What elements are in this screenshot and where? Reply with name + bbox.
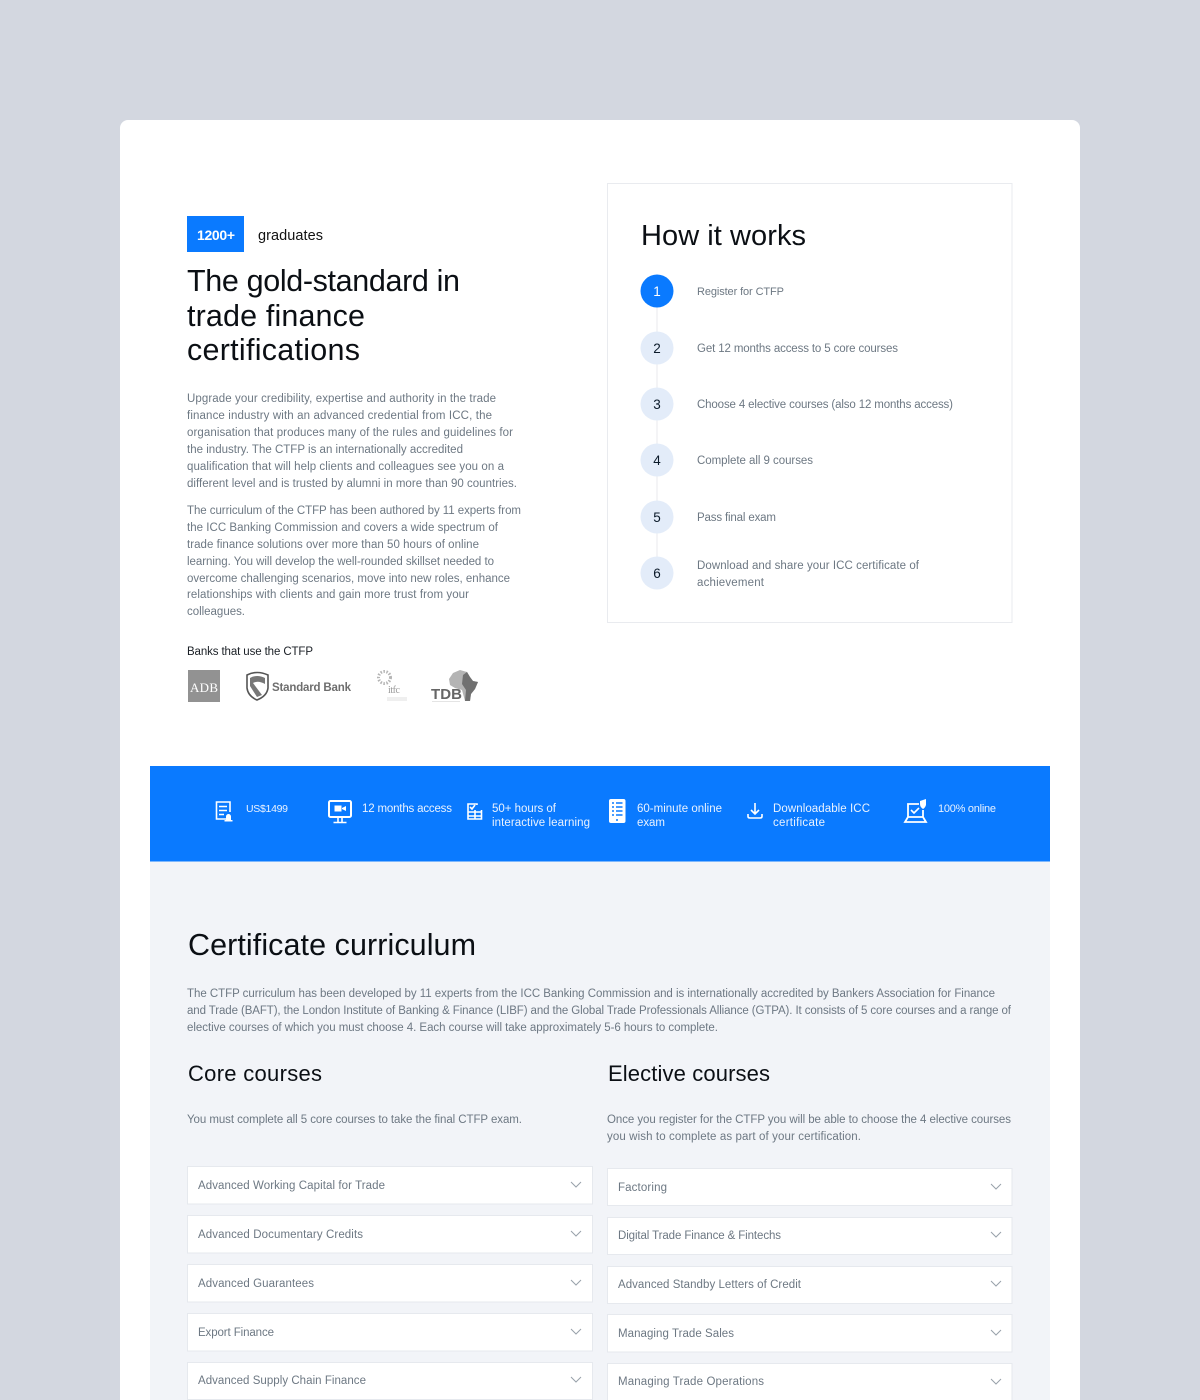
bank logos bbox=[188, 670, 478, 703]
course: trade operations: Managing Trade Operations bbox=[618, 1376, 764, 1388]
curriculum description bbox=[187, 988, 1012, 1034]
main heading: The gold-standard in bbox=[187, 264, 460, 298]
step 5 bbox=[640, 500, 776, 534]
course: factoring: Factoring bbox=[618, 1182, 667, 1194]
course: documentary credits: Advanced Documentary Credits bbox=[198, 1229, 363, 1241]
course: trade sales bbox=[608, 1314, 1012, 1352]
intro paragraph 2: the ICC Banking Commission and covers a wide spectrum of bbox=[187, 522, 499, 534]
intro paragraph 2: learning. You will develop the well-rounded skillset needed to bbox=[187, 556, 494, 568]
feature: access bbox=[329, 801, 452, 822]
feature: hours: 50+ hours of bbox=[492, 803, 557, 815]
step 5: 5 bbox=[653, 510, 661, 525]
feature: certificate: certificate bbox=[773, 817, 825, 829]
step 1: Register for CTFP bbox=[697, 286, 784, 298]
feature: online: 100% online bbox=[938, 803, 996, 815]
main heading: trade finance bbox=[187, 299, 365, 333]
course: digital trade finance: Digital Trade Finance & Fintechs bbox=[618, 1230, 781, 1242]
banks label: Banks that use the CTFP bbox=[187, 646, 313, 658]
curriculum description: The CTFP curriculum has been developed by 11 experts from the ICC Banking Commission and is internationally accredited by Bankers Association for Finance bbox=[187, 988, 995, 1000]
step 2: 2 bbox=[653, 341, 661, 356]
panel: elective courses bbox=[607, 1061, 1012, 1400]
graduates badge bbox=[187, 216, 323, 252]
course: supply chain finance bbox=[188, 1362, 592, 1400]
elective courses heading: Elective courses bbox=[608, 1061, 770, 1086]
intro paragraph 1: finance industry with an advanced credential from ICC, the bbox=[187, 410, 492, 422]
main heading: certifications bbox=[187, 333, 360, 367]
intro paragraph 2 bbox=[187, 505, 521, 618]
feature: online bbox=[905, 799, 996, 822]
step 2 bbox=[640, 332, 898, 364]
graduates badge: graduates bbox=[258, 228, 323, 244]
step 1: 1 bbox=[653, 284, 661, 299]
intro paragraph 2: The curriculum of the CTFP has been authored by 11 experts from bbox=[187, 505, 521, 517]
how it works heading: How it works bbox=[641, 220, 806, 252]
step 1 bbox=[640, 274, 784, 308]
step 3 bbox=[640, 388, 953, 420]
core courses heading: Core courses bbox=[188, 1061, 322, 1086]
intro paragraph 1: different level and is trusted by alumni in more than 90 countries. bbox=[187, 478, 517, 490]
feature: exam: exam bbox=[637, 817, 665, 829]
logo: ITFC bbox=[378, 672, 407, 701]
logo: Standard Bank bbox=[247, 672, 352, 700]
panel: core courses bbox=[187, 1061, 592, 1400]
step 2: Get 12 months access to 5 core courses bbox=[697, 343, 898, 355]
course: guarantees: Advanced Guarantees bbox=[198, 1278, 314, 1290]
course: standby letters: Advanced Standby Letters of Credit bbox=[618, 1279, 802, 1291]
logo: ITFC: itfc bbox=[388, 685, 401, 696]
feature: certificate: Downloadable ICC bbox=[773, 803, 870, 815]
feature: certificate bbox=[748, 803, 870, 829]
step 6: 6 bbox=[653, 566, 661, 581]
course: digital trade finance bbox=[608, 1218, 1012, 1254]
course: guarantees bbox=[188, 1264, 592, 1302]
logo: TDB bbox=[431, 670, 478, 703]
course: factoring bbox=[608, 1168, 1012, 1206]
core courses note: You must complete all 5 core courses to take the final CTFP exam. bbox=[187, 1114, 522, 1126]
course: standby letters bbox=[608, 1266, 1012, 1304]
curriculum heading: Certificate curriculum bbox=[188, 928, 476, 962]
course: documentary credits bbox=[188, 1216, 592, 1253]
intro paragraph 1 bbox=[187, 393, 517, 490]
logo: ADB: ADB bbox=[190, 680, 218, 695]
lower section background bbox=[150, 861, 1050, 1400]
course: export finance: Export Finance bbox=[198, 1327, 274, 1339]
feature: hours bbox=[468, 803, 590, 829]
intro paragraph 1: Upgrade your credibility, expertise and authority in the trade bbox=[187, 393, 496, 405]
elective courses note: Once you register for the CTFP you will be able to choose the 4 elective courses bbox=[607, 1114, 1011, 1126]
course: working capital bbox=[188, 1166, 592, 1204]
feature: price: US$1499 bbox=[246, 803, 288, 815]
feature: hours: interactive learning bbox=[492, 817, 590, 829]
intro paragraph 2: relationships with clients and gain more trust from your bbox=[187, 589, 469, 601]
course: export finance bbox=[188, 1314, 592, 1351]
step 4 bbox=[640, 444, 813, 476]
step 6: achievement bbox=[697, 577, 765, 589]
curriculum description: elective courses of which you must choose 4. Each course will take approximately 5-6 hours to complete. bbox=[187, 1022, 718, 1034]
intro paragraph 1: qualification that will help clients and colleagues see you on a bbox=[187, 461, 505, 473]
step 4: 4 bbox=[653, 453, 661, 468]
logo: ADB bbox=[188, 670, 220, 702]
blue feature band bbox=[150, 766, 1050, 862]
white page card bbox=[120, 120, 1080, 1400]
elective courses note bbox=[607, 1114, 1011, 1143]
intro paragraph 1: the industry. The CTFP is an internationally accredited bbox=[187, 444, 463, 456]
step 4: Complete all 9 courses bbox=[697, 455, 813, 467]
step connector bbox=[656, 300, 658, 565]
course: trade operations bbox=[608, 1364, 1012, 1400]
intro paragraph 1: organisation that produces many of the rules and guidelines for bbox=[187, 427, 513, 439]
graduates badge: 1200+ bbox=[197, 227, 235, 243]
curriculum description: and Trade (BAFT), the London Institute of Banking & Finance (LIBF) and the Global Trade Professionals Alliance (GTPA). It consists of 5 core courses and a range of bbox=[187, 1005, 1012, 1017]
step 3: 3 bbox=[653, 397, 661, 412]
elective courses note: you wish to complete as part of your certification. bbox=[607, 1131, 861, 1143]
logo: Standard Bank: Standard Bank bbox=[272, 682, 352, 694]
intro paragraph 2: trade finance solutions over more than 50 hours of online bbox=[187, 539, 479, 551]
step 6 bbox=[640, 556, 920, 590]
course: trade sales: Managing Trade Sales bbox=[618, 1328, 734, 1340]
logo: TDB: TDB bbox=[431, 686, 462, 703]
main heading bbox=[187, 264, 460, 367]
intro paragraph 2: overcome challenging scenarios, move into new roles, enhance bbox=[187, 573, 510, 585]
feature: price bbox=[216, 802, 288, 822]
step 6: Download and share your ICC certificate of bbox=[697, 560, 920, 572]
panel: how it works bbox=[608, 184, 1012, 622]
intro paragraph 2: colleagues. bbox=[187, 606, 245, 618]
feature: access: 12 months access bbox=[362, 803, 452, 815]
course: supply chain finance: Advanced Supply Chain Finance bbox=[198, 1375, 366, 1387]
course: working capital: Advanced Working Capital for Trade bbox=[198, 1180, 385, 1192]
feature: exam bbox=[609, 799, 722, 829]
feature: exam: 60-minute online bbox=[637, 803, 722, 815]
step 5: Pass final exam bbox=[697, 512, 776, 524]
step 3: Choose 4 elective courses (also 12 months access) bbox=[697, 399, 953, 411]
